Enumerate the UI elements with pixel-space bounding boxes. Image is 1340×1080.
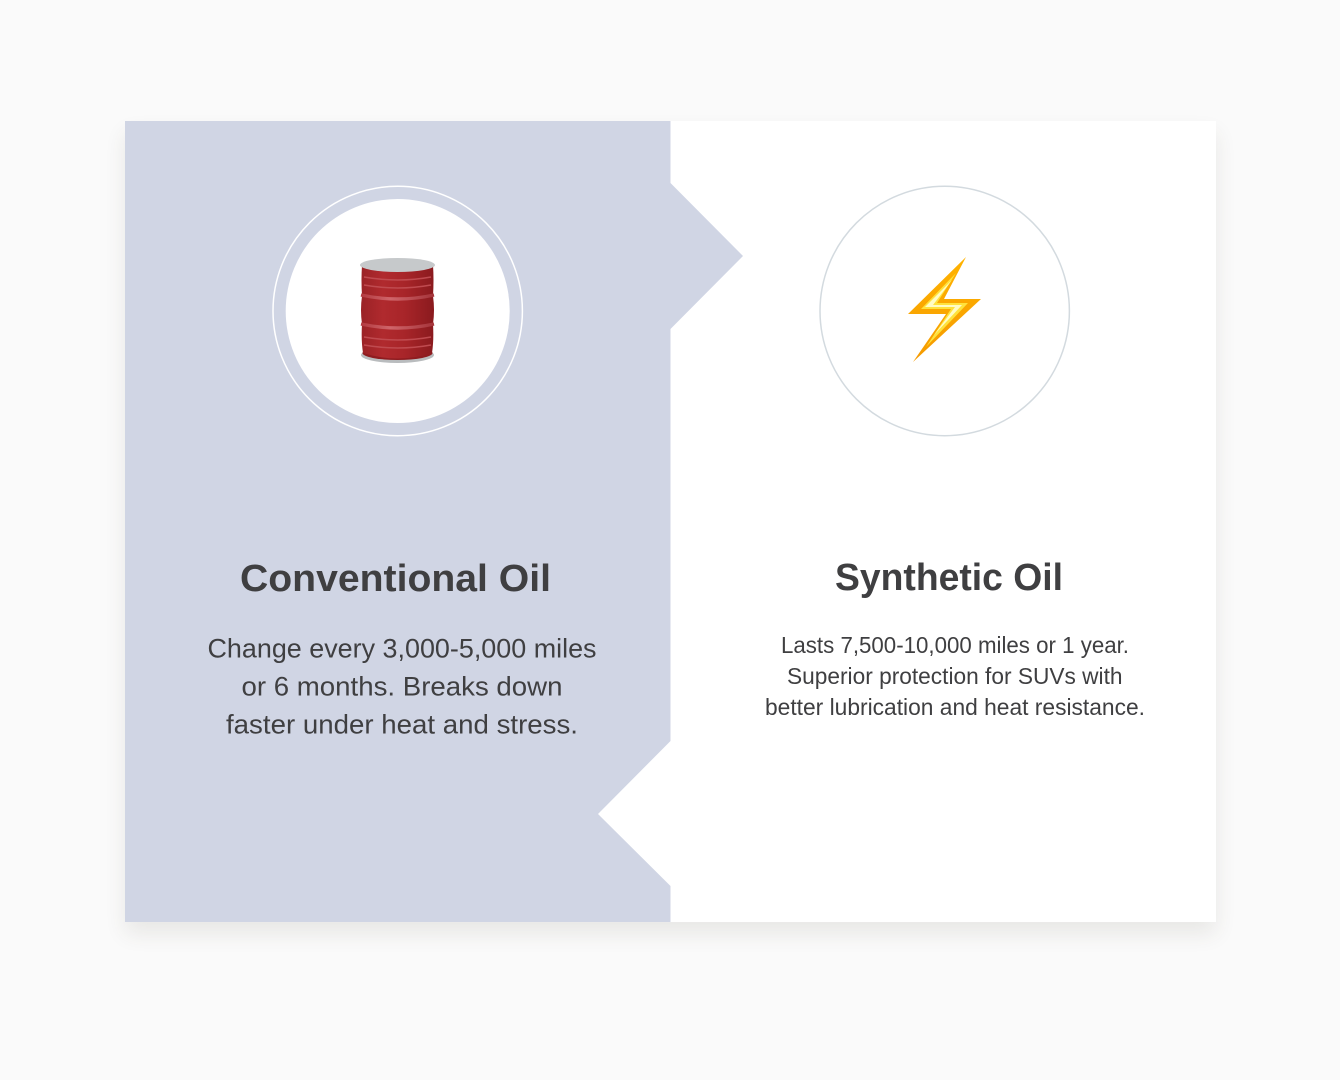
- text block: conventional oil description: faster under heat and stress.: [226, 710, 578, 740]
- card: [125, 121, 1216, 922]
- icon: conventional oil barrel in circle: [273, 186, 522, 436]
- text block: synthetic oil description: better lubrication and heat resistance.: [765, 694, 1145, 720]
- heading: synthetic oil: Synthetic Oil: [835, 557, 1063, 599]
- text block: conventional oil description: [208, 634, 596, 740]
- barrel: [360, 258, 435, 363]
- text block: synthetic oil description: Superior protection for SUVs with: [787, 663, 1122, 689]
- text block: synthetic oil description: [765, 632, 1145, 720]
- heading: conventional oil: Conventional Oil: [240, 558, 551, 600]
- icon: lightning bolt in circle: [820, 186, 1069, 436]
- panel: conventional oil background with arrow notch: [125, 121, 743, 922]
- text block: conventional oil description: or 6 months. Breaks down: [242, 672, 562, 702]
- card shadow: [125, 133, 1216, 934]
- text block: conventional oil description: Change every 3,000-5,000 miles: [208, 634, 596, 664]
- text block: synthetic oil description: Lasts 7,500-10,000 miles or 1 year.: [781, 632, 1129, 658]
